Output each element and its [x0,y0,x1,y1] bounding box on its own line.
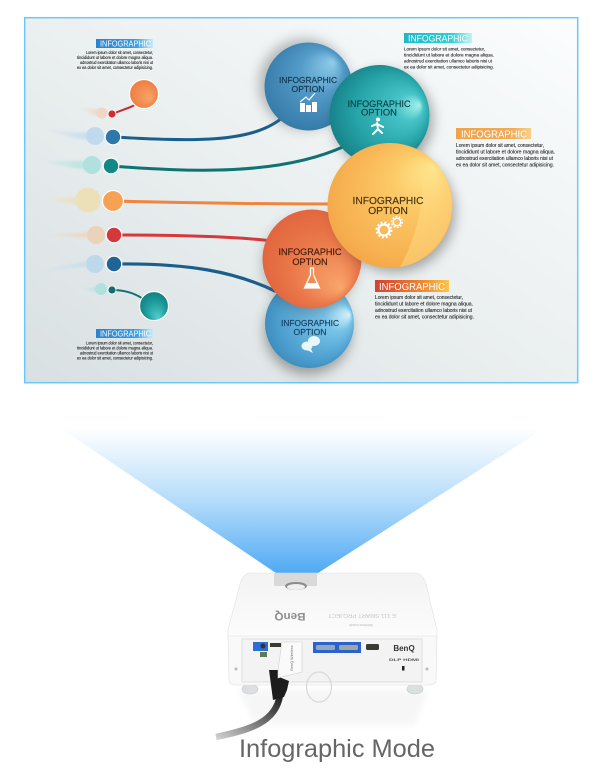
callout: lower right: ex ea dolor sit amet, consectetur adipisicing. [375,314,474,320]
callout: lower right: adnostrud exercitation ullamco laboris nisi ut [375,308,473,314]
icon: chat bubbles [302,336,320,353]
hdmi label: DLP HDMI [389,658,419,662]
callout: top left: Lorem ipsum dolor sit amet, consectetur, [86,50,153,55]
callout: top right: Lorem ipsum dolor sit amet, consectetur, [404,46,485,52]
hdmi port [270,643,281,647]
top logo: BenQ [274,610,305,622]
bubble: red: OPTION [292,257,328,267]
icon: flask [304,268,320,288]
callout: bottom left: tincididunt ut labore et dolore magna aliqua. [77,346,153,350]
floor reflection [238,690,428,725]
top panel marks [327,612,396,627]
bubble: teal: INFOGRAPHIC [348,98,411,109]
callout: top right: adnostrud exercitation ullamco laboris nisi ut [404,58,493,64]
callout: top left: ex ea dolor sit amet, consectetur adipisicing. [77,65,153,70]
bubble: blue top [259,39,352,130]
lock slot [402,666,404,670]
faded trails and ghost dots [34,106,108,295]
callout: lower right: Lorem ipsum dolor sit amet, consectetur, [375,295,463,301]
callout: middle right: adnostrud exercitation ullamco laboris nisi ut [456,156,554,162]
bubble: blue bottom: INFOGRAPHIC [281,318,339,328]
projector feet [242,684,423,694]
front logo: BenQ [393,644,415,653]
callout: lower right [375,280,474,320]
callout: middle right: Lorem ipsum dolor sit amet, consectetur, [456,143,544,149]
callout: top left: tincididunt ut labore et dolore magna aliqua. [77,55,153,60]
bubble: teal [330,65,433,170]
callout: bottom left: adnostrud exercitation ullamco laboris nisi ut [80,350,154,356]
bubble: teal: OPTION [361,106,397,118]
icon: gears [376,217,402,238]
bubble: yellow [328,143,455,272]
bubble: yellow: INFOGRAPHIC [352,196,424,207]
callout: top right: tincididunt ut labore et dolore magna aliqua. [404,52,494,58]
bubble: blue bottom [264,279,354,375]
callout: bottom left: INFOGRAPHIC [100,330,151,338]
power cable [216,695,280,737]
front face [228,636,437,685]
callout: bottom left: Lorem ipsum dolor sit amet, consectetur, [86,340,153,346]
wireless dongle [278,642,302,678]
bubble: blue bottom: OPTION [294,327,326,337]
connector lines [111,94,345,306]
callout: middle right: tincididunt ut labore et dolore magna aliqua. [456,150,555,156]
lens housing [274,573,317,590]
callout: middle right [456,128,555,168]
projector [216,573,437,737]
callout: bottom left [77,329,154,360]
callout: top left: adnostrud exercitation ullamco laboris nisi ut [80,60,154,65]
ports panel [242,639,422,682]
callout: middle right: INFOGRAPHIC [461,130,527,140]
small colored nodes [102,80,168,320]
top panel marks: Wireless Inside [349,623,373,627]
icon: runner [372,118,383,134]
callout: middle right: ex ea dolor sit amet, consectetur adipisicing. [456,162,554,168]
top panel marks: E 111 SMART PROJECT [327,612,396,618]
callout: lower right: tincididunt ut labore et dolore magna aliqua. [375,302,473,308]
icon: bar chart [300,93,317,112]
screws [234,668,428,670]
audio ports [253,642,268,657]
callout: top left [77,39,154,70]
callout: lower right: INFOGRAPHIC [379,281,445,293]
callout: bottom left: ex ea dolor sit amet, consectetur adipisicing. [77,356,153,360]
projector top shell [228,573,437,638]
caption: Infographic Mode [239,735,435,763]
callout: top right: ex ea dolor sit amet, consectetur adipisicing. [404,64,494,70]
bubble: blue top: OPTION [292,84,324,94]
bubble: red [262,210,362,312]
wireless dongle: BenQ Wireless [290,645,294,671]
callout: top right [404,33,494,70]
bubble: yellow: OPTION [368,206,408,217]
blue vga block [313,642,361,653]
power plug [269,670,289,700]
panel: projected screen [25,18,578,383]
bubble: red: INFOGRAPHIC [278,247,342,257]
bubble: blue top: INFOGRAPHIC [279,75,337,85]
projector light beam [60,428,545,573]
loop strap [306,672,332,702]
callout: top right: INFOGRAPHIC [408,34,468,44]
callout: top left: INFOGRAPHIC [100,40,151,48]
serial port [366,644,379,650]
